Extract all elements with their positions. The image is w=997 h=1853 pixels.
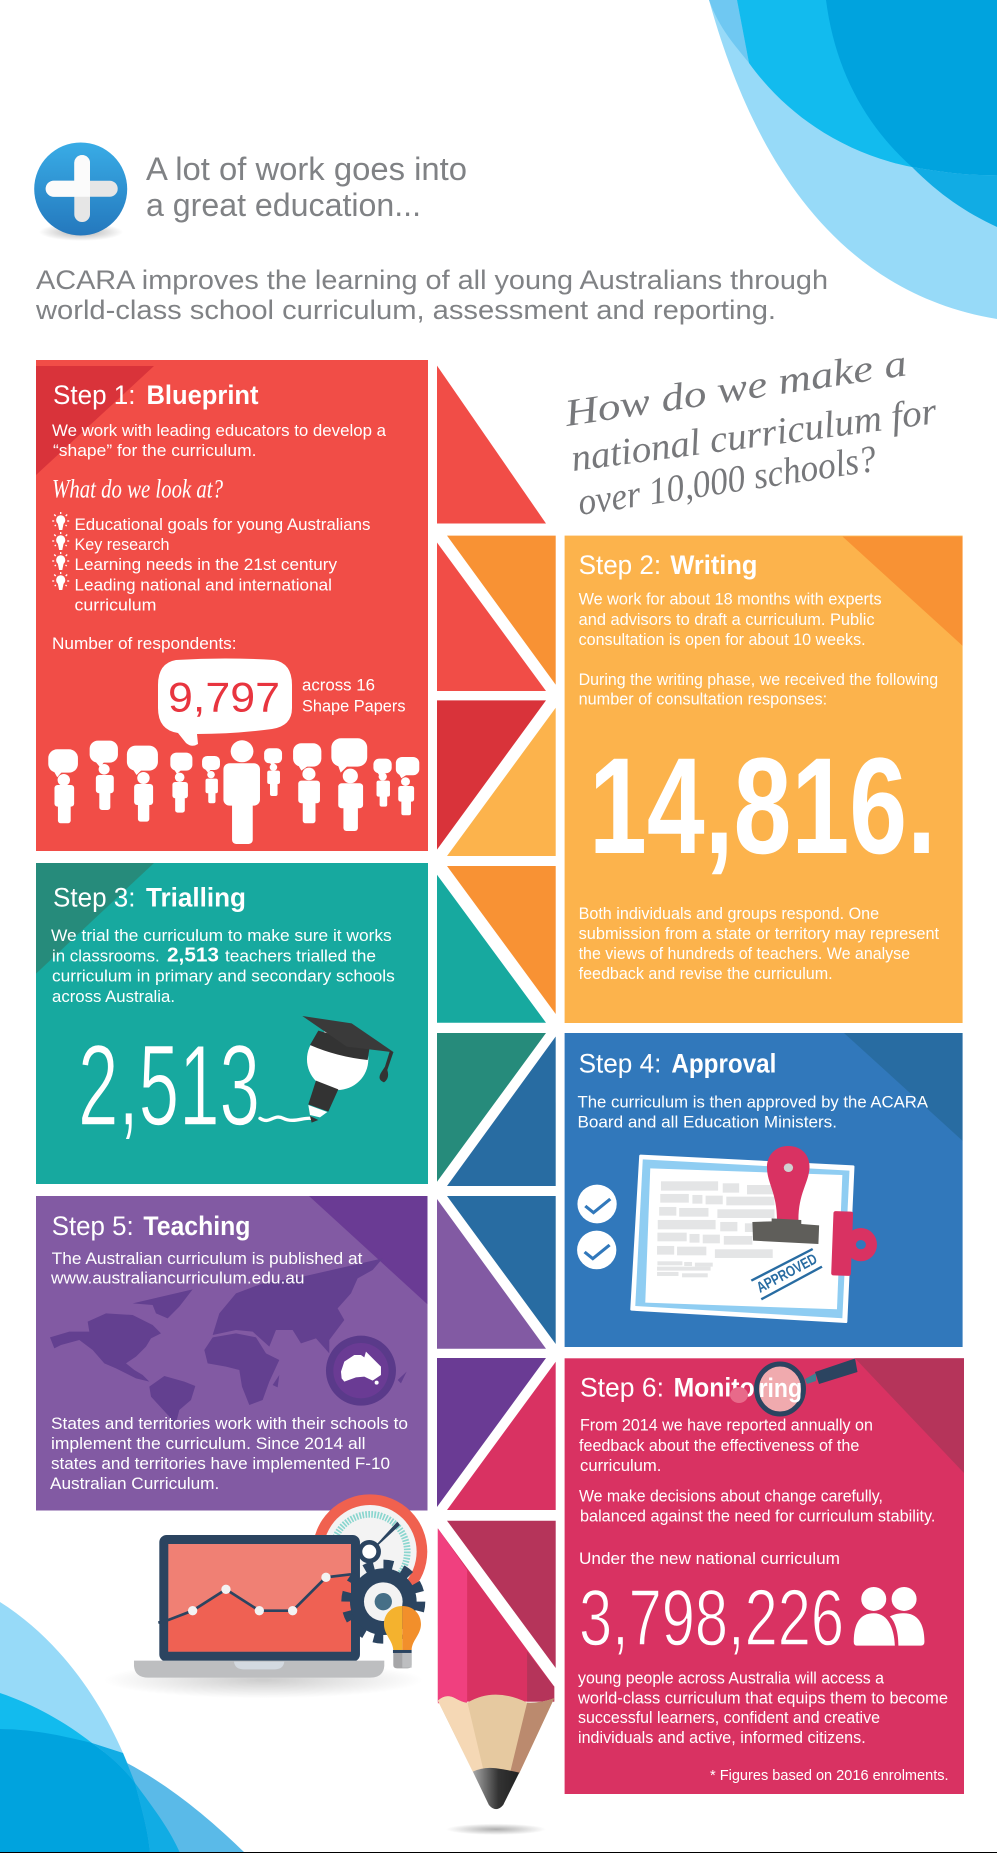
heading: step 4: Step 4: (579, 1049, 661, 1079)
step 3 description: 2,513 (167, 944, 219, 966)
step 5 closing text: states and territories have implemented F-10 (51, 1454, 390, 1473)
handwritten question: How do we make a (561, 342, 910, 435)
icon: approved clipboard and check marks (577, 1146, 877, 1322)
caption: shape papers: Shape Papers (302, 697, 406, 716)
world map (50, 1258, 407, 1430)
respondents label: Number of respondents: (52, 634, 237, 653)
step 3 description (51, 926, 395, 1006)
step 2 description: consultation is open for about 10 weeks. (579, 630, 866, 649)
heading: step 1 (53, 380, 259, 410)
icon: marker with graduation cap (260, 1016, 394, 1123)
step 6 description: feedback about the effectiveness of the (579, 1436, 859, 1455)
step 6 description: We make decisions about change carefully, (579, 1487, 883, 1506)
handwritten question: over 10,000 schools? (575, 438, 879, 524)
heading: step 4: Approval (671, 1049, 776, 1079)
step 6 closing text: successful learners, confident and creative (578, 1708, 880, 1727)
step 2 description: We work for about 18 months with experts (579, 590, 882, 609)
step 3 description: across Australia. (52, 987, 175, 1006)
panel: step 4 approval (565, 1033, 963, 1347)
step 5 closing text: Australian Curriculum. (50, 1474, 219, 1493)
heading: step 5: Step 5: (52, 1211, 134, 1241)
step 2 closing text: feedback and revise the curriculum. (579, 964, 833, 983)
step 2 closing text (579, 904, 939, 983)
step 4 description: Board and all Education Ministers. (578, 1112, 837, 1131)
heading: step 6: Step 6: (580, 1373, 664, 1403)
panel: step 5 teaching (36, 1196, 428, 1510)
stat: handwritten 2,513: 2,513 (78, 1022, 260, 1150)
step 2 description: and advisors to draft a curriculum. Public (579, 610, 875, 629)
step 6 closing text: individuals and active, informed citizens. (578, 1728, 866, 1747)
step 3 description: curriculum in primary and secondary schools (52, 966, 395, 985)
step 6 description: From 2014 we have reported annually on (580, 1416, 873, 1435)
step 5 description (50, 1249, 363, 1288)
step 1 description: We work with leading educators to develop a (52, 421, 387, 440)
handwritten question: national curriculum for (569, 390, 939, 480)
step 6 closing text (577, 1668, 948, 1747)
background: bottom left blue shapes (0, 1602, 245, 1853)
illustration: laptop with chart, gauge, gear and bulb (103, 1494, 427, 1698)
step 2 closing text: the views of hundreds of teachers. We analyse (579, 944, 910, 963)
heading: step 2: Step 2: (579, 550, 661, 580)
pencil triangle column (437, 366, 556, 1668)
step 2 description: During the writing phase, we received the following (579, 670, 938, 689)
step 5 closing text: States and territories work with their schools to (51, 1414, 408, 1433)
panel: step 1 blueprint (36, 360, 428, 851)
heading: step 1: Blueprint (146, 380, 259, 410)
step 4 description (578, 1092, 929, 1131)
step 5 closing text (50, 1414, 408, 1493)
title: A lot of work goes into (146, 151, 467, 187)
bullet list: Key research (74, 535, 170, 554)
handwritten question (561, 342, 939, 524)
icon: magnifying glass: ring (759, 1373, 802, 1403)
bullet list: Learning needs in the 21st century (74, 555, 338, 574)
icon: crowd of people with speech bubbles (48, 738, 419, 844)
step 6 closing text: young people across Australia will access a (578, 1668, 885, 1687)
bullet list (74, 515, 370, 614)
step 3 description: teachers trialled the (225, 946, 376, 965)
handwritten subheading: What do we look at? (52, 475, 223, 504)
step 6 closing text: world-class curriculum that equips them to become (577, 1688, 948, 1707)
icon: plus badge (34, 142, 127, 241)
bullet list: curriculum (74, 596, 156, 614)
step 5 closing text: implement the curriculum. Since 2014 all (51, 1434, 366, 1453)
icons: light bulb bullets (52, 512, 69, 590)
step 2 closing text: submission from a state or territory may represent (579, 924, 939, 943)
heading: step 1: Step 1: (53, 380, 136, 410)
panel: step 3 trialling (36, 863, 428, 1184)
step 4 description: The curriculum is then approved by the ACARA (578, 1092, 929, 1111)
heading: step 6 (580, 1373, 755, 1403)
step 1 description (52, 421, 387, 460)
stamp text: APPROVED (754, 1250, 820, 1297)
heading: step 3: Step 3: (53, 882, 136, 912)
icon: two people (854, 1587, 924, 1646)
heading: step 6: Monito (674, 1373, 755, 1403)
title: a great education... (146, 187, 421, 223)
step 2 closing text: Both individuals and groups respond. One (579, 904, 879, 923)
step 2 description (579, 590, 938, 709)
step 3 description: We trial the curriculum to make sure it works (51, 926, 392, 945)
footnote: * Figures based on 2016 enrolments. (710, 1767, 949, 1784)
intro text: world-class school curriculum, assessment and reporting. (35, 295, 776, 325)
heading: step 3: Trialling (146, 882, 246, 912)
step 2 description: number of consultation responses: (579, 690, 827, 709)
step 1 description: “shape” for the curriculum. (53, 441, 256, 460)
title (146, 151, 467, 223)
icon: pencil tip (438, 1528, 554, 1835)
panel: step 6 monitoring (565, 1358, 964, 1794)
bullet list: Educational goals for young Australians (74, 515, 370, 534)
step 5 description: www.australiancurriculum.edu.au (50, 1269, 304, 1288)
step 6 description: curriculum. (580, 1456, 661, 1475)
heading: step 2 (579, 550, 757, 580)
caption: shape papers (302, 676, 406, 716)
step 6 description (579, 1416, 935, 1568)
icon: Australia highlight (326, 1336, 396, 1406)
stat: 3,798,226: 3,798,226 (579, 1573, 844, 1662)
intro text (35, 265, 828, 325)
heading: step 5: Teaching (143, 1211, 250, 1241)
heading: step 4 (579, 1049, 776, 1079)
stat: 9,797: 9,797 (168, 674, 280, 721)
step 5 description: The Australian curriculum is published at (52, 1249, 363, 1268)
intro text: ACARA improves the learning of all young Australians through (36, 265, 828, 295)
speech bubble (158, 658, 292, 746)
step 6 description: balanced against the need for curriculum stability. (580, 1507, 935, 1526)
caption: shape papers: across 16 (302, 676, 375, 695)
heading: step 3 (53, 882, 246, 912)
heading: step 2: Writing (670, 550, 757, 580)
step 6 description: Under the new national curriculum (579, 1549, 840, 1568)
panel: step 2 writing (565, 536, 963, 1023)
step 3 description: in classrooms. (52, 946, 160, 965)
icon: magnifying glass (730, 1358, 858, 1414)
background: top right blue shapes (709, 0, 997, 319)
bullet list: Leading national and international (74, 576, 332, 594)
heading: step 5 (52, 1211, 250, 1241)
